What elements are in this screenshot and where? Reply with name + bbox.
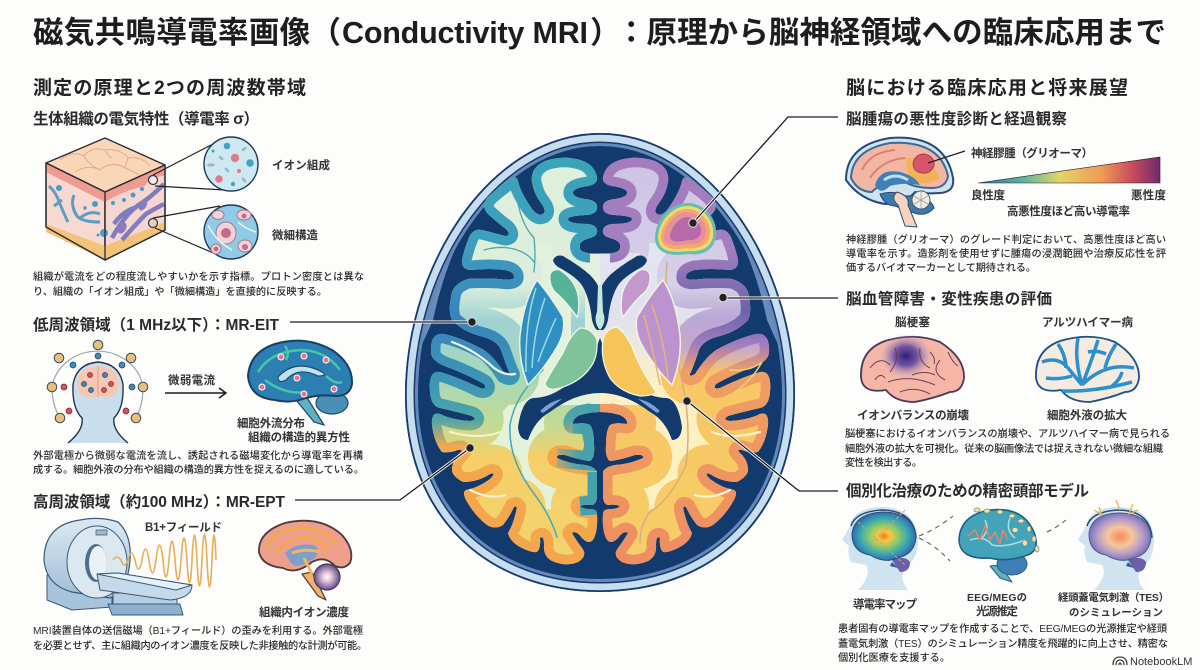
label: ion concentration: 組織内イオン濃度 [259, 605, 350, 619]
illustration: tissue cube [46, 138, 225, 260]
left hemisphere cortex [430, 158, 602, 564]
heading: applications: 脳における臨床応用と将来展望 [846, 77, 1128, 99]
label: glioma: 神経膠腫（グリオーマ） [971, 146, 1093, 160]
illustration: MRI scanner [44, 518, 130, 610]
paragraph: vascular: 脳梗塞におけるイオンバランスの崩壊や、アルツハイマー病で見られる [845, 427, 1170, 440]
paragraph: conductivity: 組織が電流をどの程度流しやすいかを示す指標。プロトン密度とは異な [33, 270, 364, 283]
illustration: infarct brain [861, 334, 964, 402]
leader: tumor [689, 117, 838, 227]
label: extracellular expansion: 細胞外液の拡大 [1047, 408, 1128, 422]
paragraph: head model [838, 622, 1168, 664]
anterior horns [553, 256, 647, 330]
label: EEG MEG: 光源推定 [976, 604, 1018, 618]
label: microstructure: 微細構造 [272, 228, 318, 242]
paragraph: tumor: 神経膠腫（グリオーマ）のグレード判定において、高悪性度ほど高い [846, 233, 1166, 246]
illustration: orange brain [259, 521, 351, 600]
illustration: conductivity map head [842, 507, 918, 590]
leader lines [290, 117, 838, 500]
subheading: electric properties: 生体組織の電気特性（導電率 σ） [33, 109, 259, 128]
leader: vascular [719, 293, 838, 302]
paragraph: vascular: 細胞外液の拡大を可視化。従来の脳画像法では捉えきれない微細な組織 [845, 442, 1163, 455]
title: ：原理から脳神経領域への臨床応用まで [616, 16, 1166, 50]
label: infarct: 脳梗塞 [895, 315, 930, 329]
label: B1 field: B1+フィールド [145, 522, 222, 534]
label: ion imbalance: イオンバランスの崩壊 [857, 408, 970, 422]
paragraph: head model: 患者固有の導電率マップを作成することで、EEG/MEGの光源推定や経頭 [838, 622, 1168, 635]
paragraph: tumor: 価するバイオマーカーとして期待される。 [846, 261, 1036, 274]
icon: NotebookLM [1113, 657, 1127, 665]
label: higher grade conductivity: 高悪性度ほど高い導電率 [1007, 204, 1130, 218]
label: high grade: 悪性度 [1131, 188, 1166, 202]
paragraph: MR-EIT [33, 449, 364, 476]
paragraph: tumor [846, 233, 1166, 274]
title: Conductivity MRI [342, 16, 588, 50]
label: TES: 経頭蓋電気刺激（TES） [1058, 591, 1169, 604]
illustration: head with electrodes [47, 340, 148, 443]
tumor concentric blob [655, 203, 716, 255]
choroid plexus [540, 399, 660, 413]
title: 磁気共鳴導電率画像（ [33, 16, 341, 50]
illustration: Alzheimer brain [1036, 337, 1139, 402]
paragraph: MR-EPT: を必要とせず、主に組織内のイオン濃度を反映した非接触的な計測が可能。 [33, 639, 367, 652]
title: ） [590, 16, 620, 50]
paragraph: MR-EIT: 外部電極から微弱な電流を流し、誘起される磁場変化から導電率を再構 [33, 449, 363, 462]
label: extracellular flow: 細胞外流分布 [237, 416, 305, 430]
right panel: clinical applications [838, 77, 1170, 664]
label: low grade: 良性度 [971, 188, 1006, 202]
subheading: head model: 個別化治療のための精密頭部モデル [846, 481, 1089, 500]
wave: B1 field [113, 534, 216, 587]
subheading: tumor: 脳腫瘍の悪性度診断と経過観察 [846, 109, 1067, 128]
label: conductivity map: 導電率マップ [853, 597, 918, 611]
label: extracellular flow: 組織の構造的異方性 [248, 430, 350, 444]
label: TES: のシミュレーション [1069, 608, 1163, 619]
paragraph: conductivity [33, 270, 364, 298]
heading: MR-EIT: 低周波領域（1 MHz以下）：MR-EIT [33, 316, 280, 334]
subheading: vascular: 脳血管障害・変性疾患の評価 [846, 289, 1052, 308]
scanner table [97, 573, 192, 615]
paragraph: MR-EIT: 成する。細胞外液の分布や組織の構造的異方性を捉えるのに適している。 [33, 463, 364, 476]
label: ion composition: イオン組成 [272, 158, 330, 172]
leader: head model [683, 397, 838, 491]
skull layers [405, 133, 795, 592]
paragraph: head model: 個別化医療を支援する。 [838, 651, 950, 664]
label: TES [1058, 591, 1169, 619]
illustration: TES head [1078, 500, 1154, 590]
paragraph: conductivity: り、組織の「イオン組成」や「微細構造」を直接的に反映する。 [33, 285, 327, 298]
label: Alzheimer: アルツハイマー病 [1042, 316, 1134, 329]
vessels and white matter tracts [450, 203, 762, 543]
paragraph: head model: 蓋電気刺激（TES）のシミュレーション精度を飛躍的に向上させ、精密な [838, 637, 1168, 650]
arrow: current [165, 388, 226, 398]
illustration: tumor brain [846, 138, 953, 227]
illustration: blue brain with dots [248, 341, 352, 425]
paragraph: MR-EPT [33, 624, 367, 652]
paragraph: vascular [845, 427, 1170, 469]
right internal capsule stripes [636, 280, 680, 385]
title [33, 16, 1166, 50]
leader: MR-EIT [290, 318, 476, 326]
NotebookLM logo [1113, 656, 1192, 668]
central brain axial conductivity map [405, 133, 795, 592]
label: weak current: 微弱電流 [168, 373, 216, 387]
dashed connectors [919, 516, 1066, 561]
leader: MR-EPT [295, 444, 474, 500]
illustration: EEG MEG brain [959, 508, 1039, 582]
ventricles navy [518, 338, 682, 440]
left internal capsule stripes [520, 280, 564, 385]
chart: grade gradient wedge [978, 157, 1160, 183]
paragraph: vascular: 変性を検出する。 [845, 456, 922, 469]
paragraph: tumor: 導電率を示す。造影剤を使用せずに腫瘍の浸潤範囲や治療反応性を評 [846, 247, 1166, 260]
text: NotebookLM: NotebookLM [1130, 656, 1192, 668]
icon: microstructure lens [204, 205, 258, 259]
left panel: principles [33, 77, 367, 652]
septum drop [596, 286, 604, 330]
label: EEG MEG [967, 593, 1027, 618]
paragraph: MR-EPT: MRI装置自体の送信磁場（B1+フィールド）の歪みを利用する。外部電極 [33, 624, 363, 637]
caudate nuclei [550, 270, 650, 317]
lentiform nuclei [545, 327, 656, 396]
icon: ion composition lens [204, 137, 258, 191]
right hemisphere cortex [598, 158, 770, 564]
label: extracellular flow [237, 416, 350, 444]
label: EEG MEG: EEG/MEGの [967, 593, 1027, 604]
heading: MR-EPT: 高周波領域（約100 MHz）：MR-EPT [33, 493, 286, 511]
heading: principles: 測定の原理と2つの周波数帯域 [33, 77, 306, 99]
tumor pointer line [928, 151, 965, 163]
